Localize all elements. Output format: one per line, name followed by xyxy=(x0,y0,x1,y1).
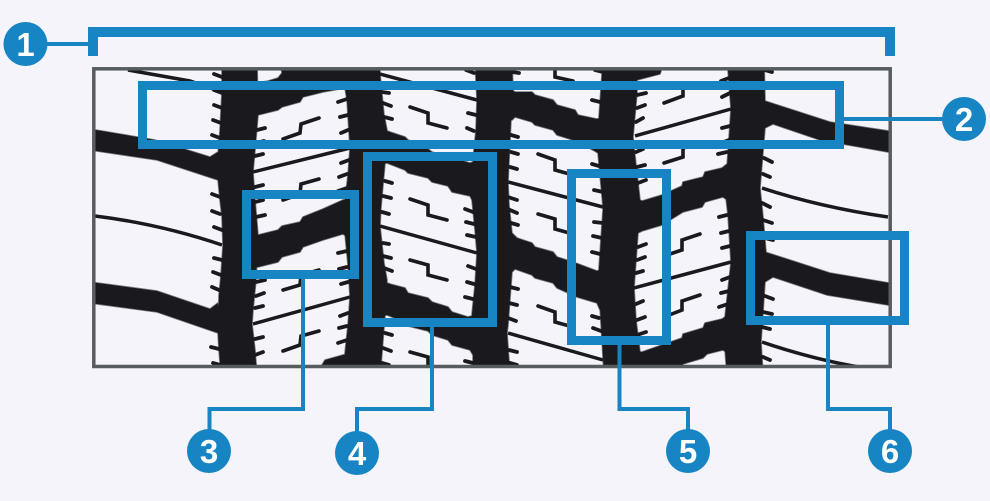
number badge 3: 3 xyxy=(200,433,218,470)
leader line 4 xyxy=(357,327,432,437)
number badge 4: 4 xyxy=(348,435,367,472)
tire tread pattern xyxy=(90,60,895,375)
leader line 3 xyxy=(210,279,303,435)
tread frame xyxy=(94,69,890,367)
leader line 5 xyxy=(620,345,688,435)
callout box 6 xyxy=(750,236,904,320)
leader line 1 xyxy=(40,42,90,46)
tread grooves xyxy=(90,60,895,375)
edge ticks along grooves xyxy=(211,70,773,365)
number badge 1 xyxy=(4,22,48,66)
number badge 1: 1 xyxy=(16,26,35,63)
number badge 6 xyxy=(868,429,912,473)
callout box 5 xyxy=(572,174,666,340)
callout box 2 xyxy=(142,86,840,144)
number badge 2 xyxy=(942,97,986,141)
number badge 3 xyxy=(187,429,231,473)
number badge 6: 6 xyxy=(881,433,899,470)
leader line 2 xyxy=(844,117,950,121)
sipes: stepped z lines xyxy=(283,62,700,372)
callout box 4 xyxy=(368,156,492,322)
callout box 3 xyxy=(246,194,354,274)
number badge 5 xyxy=(666,429,710,473)
number badge 5: 5 xyxy=(679,433,697,470)
leader line 6 xyxy=(828,325,890,435)
bracket: full tread width xyxy=(93,32,890,56)
number badge 4 xyxy=(335,431,379,475)
sipes: long thin lines xyxy=(95,70,888,368)
number badge 2: 2 xyxy=(955,101,973,138)
